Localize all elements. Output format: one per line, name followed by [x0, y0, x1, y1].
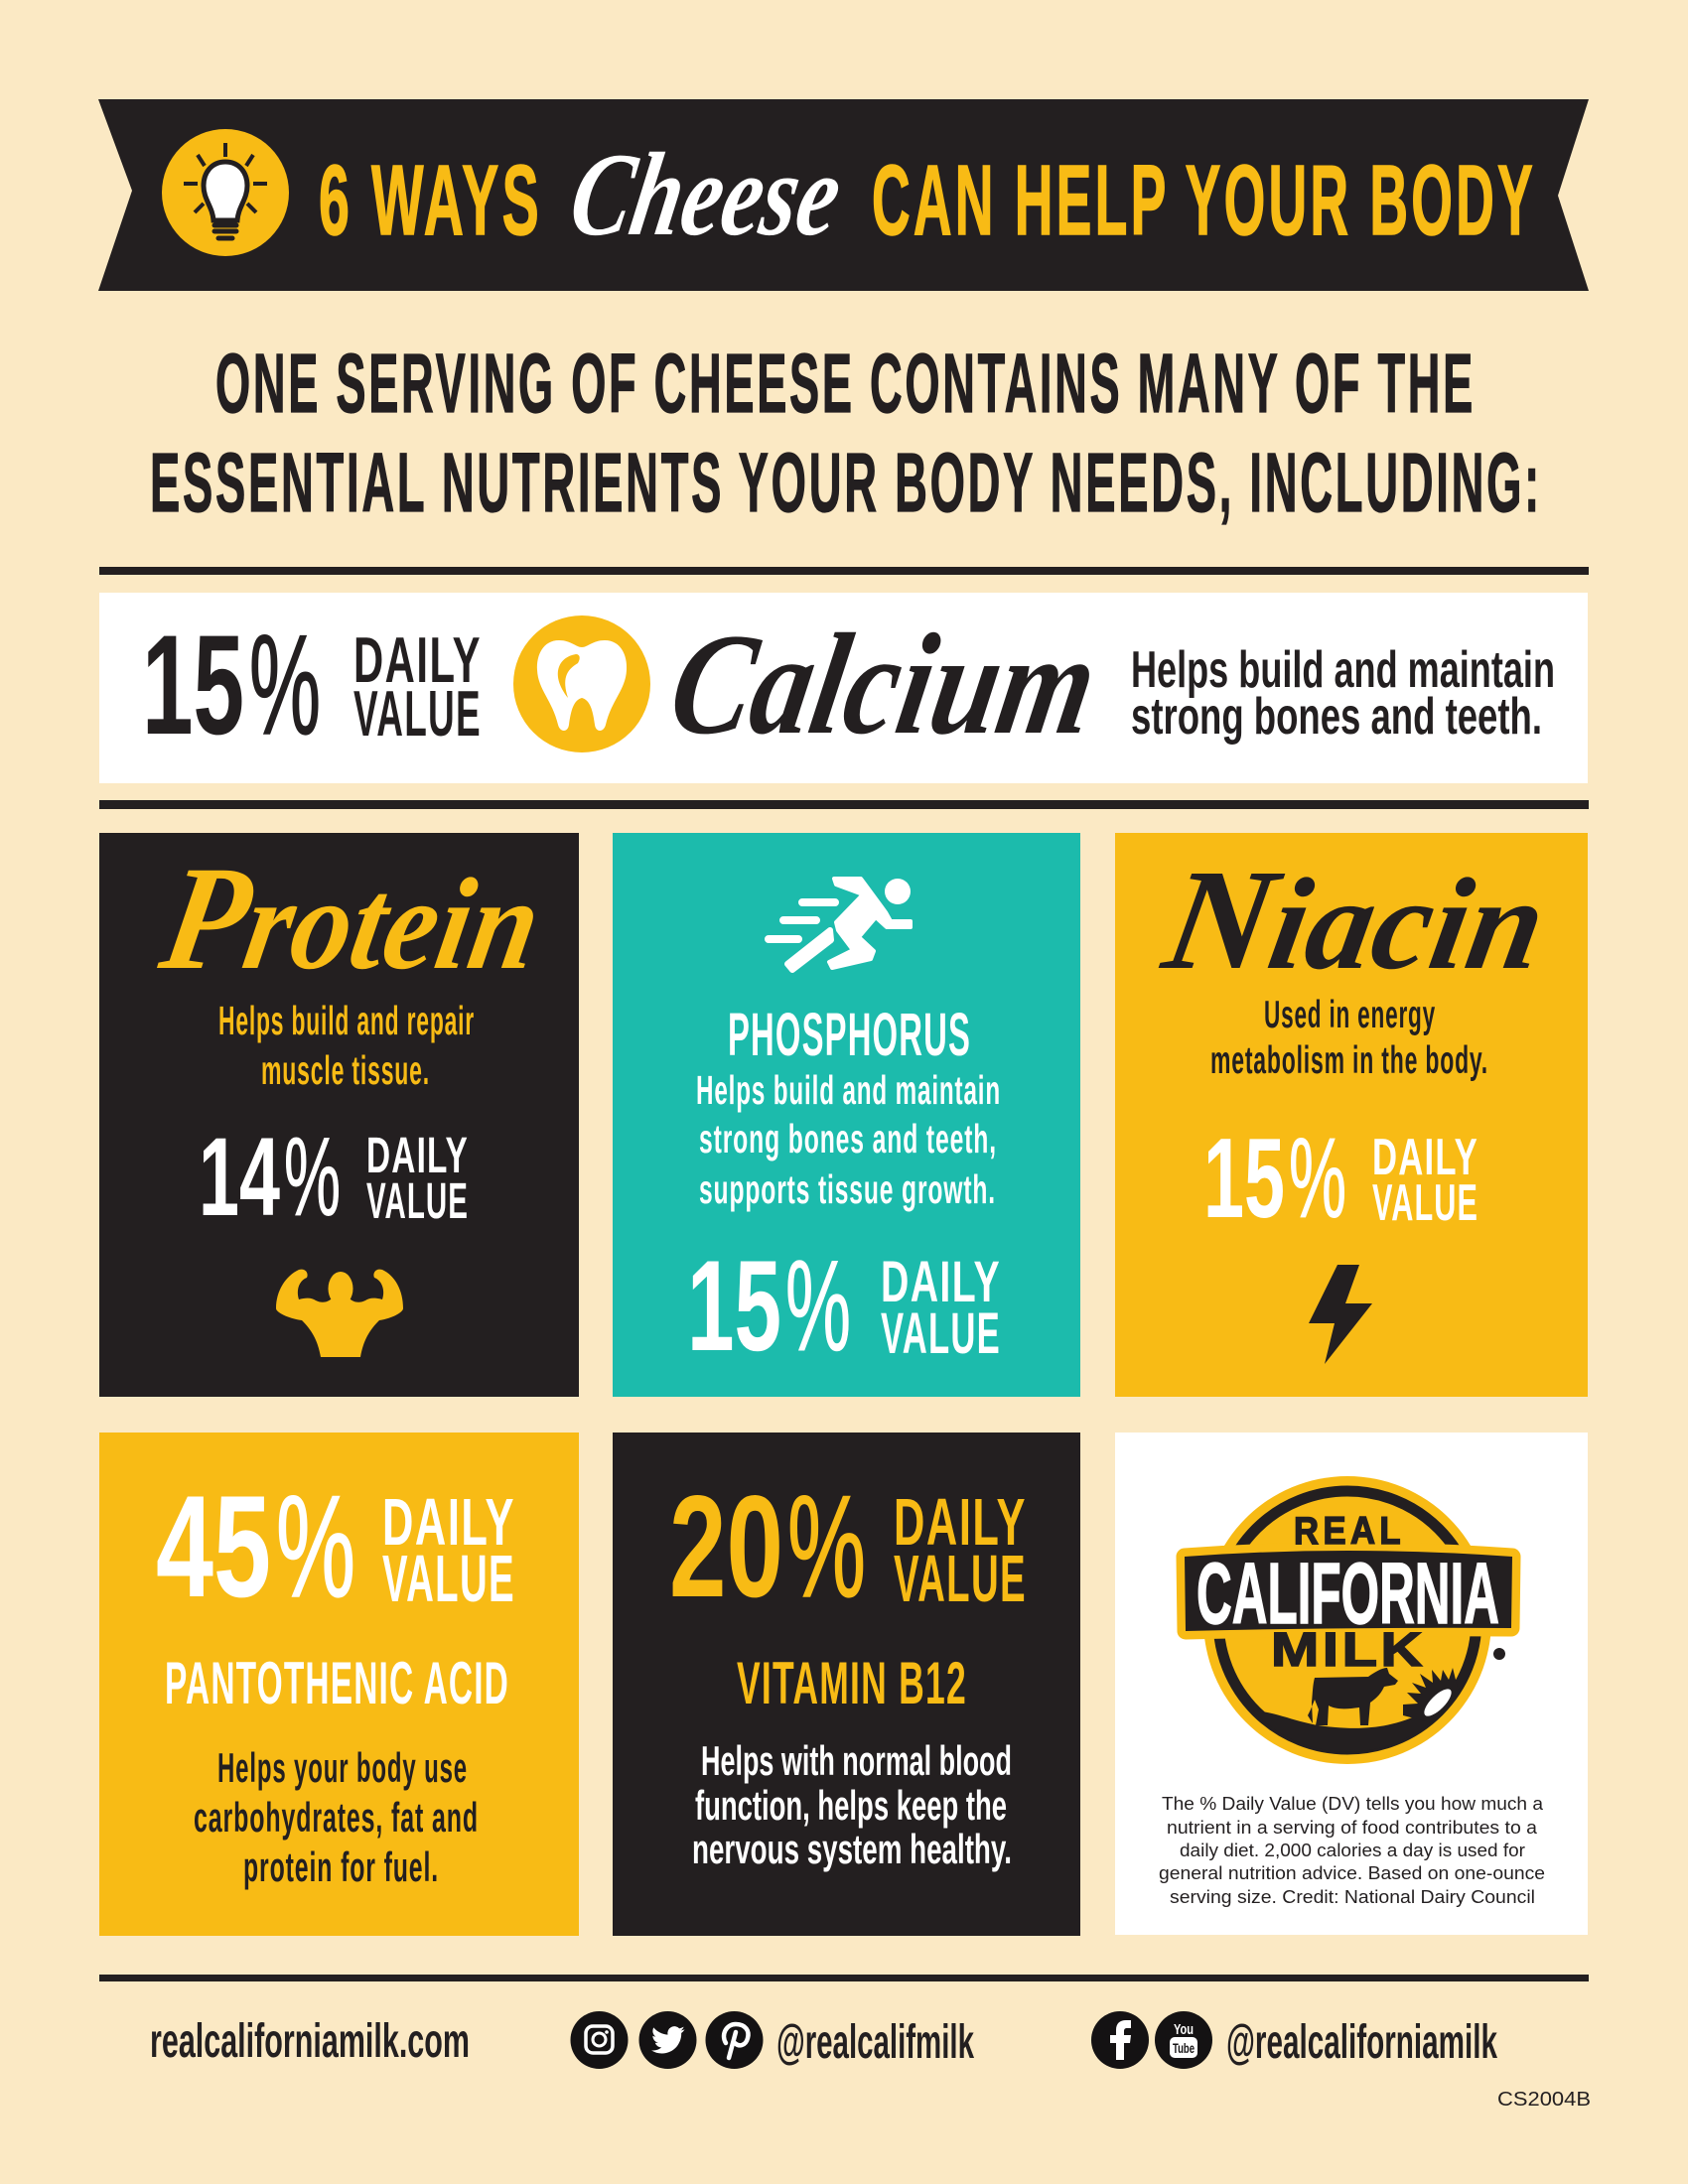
pantothenic daily value: DAILY: [382, 1485, 515, 1560]
phosphorus percent: %: [785, 1233, 851, 1378]
vitamin description: Helps with normal blood: [701, 1737, 1012, 1784]
icon: instagram: [570, 2011, 628, 2069]
logo word: milk: MILK: [1271, 1624, 1426, 1677]
daily value note: [1159, 1793, 1545, 1907]
protein percent: 14: [199, 1115, 280, 1239]
protein daily value: DAILY: [366, 1127, 469, 1183]
vitamin percent: %: [787, 1465, 866, 1627]
pantothenic description: Helps your body use: [217, 1744, 468, 1791]
pantothenic daily value: VALUE: [382, 1542, 515, 1616]
daily value note: The % Daily Value (DV) tells you how much a: [1162, 1793, 1544, 1814]
calcium description: [1131, 641, 1555, 746]
phosphorus description: strong bones and teeth,: [699, 1116, 997, 1161]
phosphorus daily value: DAILY: [881, 1250, 1001, 1314]
registered mark: [1493, 1648, 1505, 1660]
pantothenic daily value: [382, 1485, 515, 1616]
title banner: [98, 99, 1589, 291]
panel: niacin: [1115, 833, 1588, 1397]
icon: twitter: [639, 2011, 697, 2069]
pantothenic percent: %: [276, 1465, 355, 1627]
protein daily value: [366, 1127, 469, 1229]
phosphorus description: supports tissue growth.: [699, 1166, 996, 1212]
document code: CS2004B: [1497, 2088, 1591, 2111]
niacin description: [1210, 994, 1488, 1082]
icon: facebook: [1091, 2011, 1149, 2069]
protein daily value: VALUE: [366, 1172, 469, 1229]
cow: [1308, 1668, 1398, 1725]
calcium percent: 15: [142, 607, 244, 764]
niacin percent: 15: [1203, 1116, 1285, 1242]
pantothenic description: carbohydrates, fat and: [194, 1794, 479, 1841]
icon: light bulb: [162, 129, 289, 256]
vitamin description: nervous system healthy.: [692, 1826, 1012, 1872]
panel: protein: [99, 833, 579, 1397]
niacin percent: %: [1289, 1116, 1346, 1242]
pantothenic description: protein for fuel.: [243, 1843, 439, 1890]
phosphorus description: Helps build and maintain: [696, 1067, 1001, 1113]
calcium daily value: [353, 623, 482, 750]
panel: pantothenic acid: [99, 1433, 579, 1936]
protein script: Protein: [150, 835, 554, 1001]
panel: vitamin b12: [613, 1433, 1080, 1936]
pantothenic description: [194, 1744, 479, 1890]
protein percent: %: [284, 1115, 341, 1239]
icon: flexing muscles: [276, 1270, 403, 1357]
panel: phosphorus: [613, 833, 1080, 1397]
calcium percent: %: [249, 607, 321, 764]
protein description: muscle tissue.: [261, 1047, 430, 1093]
pantothenic heading: PANTOTHENIC ACID: [165, 1650, 509, 1716]
protein description: Helps build and repair: [218, 998, 475, 1043]
daily value note: general nutrition advice. Based on one-ounce: [1159, 1862, 1545, 1883]
pantothenic percent: 45: [156, 1465, 271, 1627]
vitamin description: function, helps keep the: [695, 1782, 1007, 1829]
calcium daily value: VALUE: [353, 677, 482, 750]
panel: real california milk logo and note: [1115, 1433, 1588, 1935]
phosphorus percent: 15: [687, 1233, 781, 1378]
niacin daily value: [1372, 1129, 1478, 1232]
icon: youtube: [1155, 2011, 1212, 2069]
icon: youtube: You: [1174, 2021, 1194, 2038]
icon: runner: [769, 879, 911, 970]
calcium script: Calcium: [659, 604, 1108, 764]
phosphorus heading: PHOSPHORUS: [728, 1001, 971, 1068]
vitamin daily value: VALUE: [894, 1542, 1027, 1616]
vitamin percent: 20: [669, 1465, 783, 1627]
icon: tooth: [513, 615, 650, 752]
calcium daily value: DAILY: [353, 623, 482, 696]
vitamin daily value: DAILY: [894, 1485, 1027, 1560]
niacin description: Used in energy: [1264, 994, 1436, 1036]
icon: pinterest: [705, 2011, 763, 2069]
footer handle one: @realcalifmilk: [776, 2016, 974, 2069]
logo: [1185, 1476, 1512, 1764]
niacin daily value: VALUE: [1372, 1174, 1478, 1232]
niacin description: metabolism in the body.: [1210, 1039, 1488, 1082]
niacin daily value: DAILY: [1372, 1129, 1478, 1186]
protein description: [218, 998, 475, 1093]
title text: cheese: Cheese: [561, 129, 851, 261]
vitamin heading: VITAMIN B12: [737, 1650, 967, 1716]
phosphorus daily value: [881, 1250, 1001, 1366]
vitamin daily value: [894, 1485, 1027, 1616]
sun: [1403, 1668, 1458, 1722]
logo word: real: REAL: [1294, 1510, 1405, 1553]
icon: lightning bolt: [1309, 1265, 1372, 1364]
daily value note: nutrient in a serving of food contributes to a: [1167, 1817, 1538, 1838]
footer handle two: @realcaliforniamilk: [1226, 2016, 1497, 2069]
panel: calcium: [99, 593, 1588, 783]
icon: youtube: Tube: [1173, 2040, 1195, 2056]
phosphorus daily value: VALUE: [881, 1301, 1001, 1366]
daily value note: serving size. Credit: National Dairy Council: [1170, 1886, 1535, 1907]
title text: 6 ways: 6 WAYS: [319, 145, 542, 256]
phosphorus description: [696, 1067, 1001, 1212]
daily value note: daily diet. 2,000 calories a day is used for: [1180, 1840, 1525, 1860]
footer website: realcaliforniamilk.com: [150, 2015, 470, 2068]
subheading: [150, 337, 1542, 529]
niacin script: Niacin: [1152, 840, 1558, 1000]
vitamin description: [692, 1737, 1012, 1872]
